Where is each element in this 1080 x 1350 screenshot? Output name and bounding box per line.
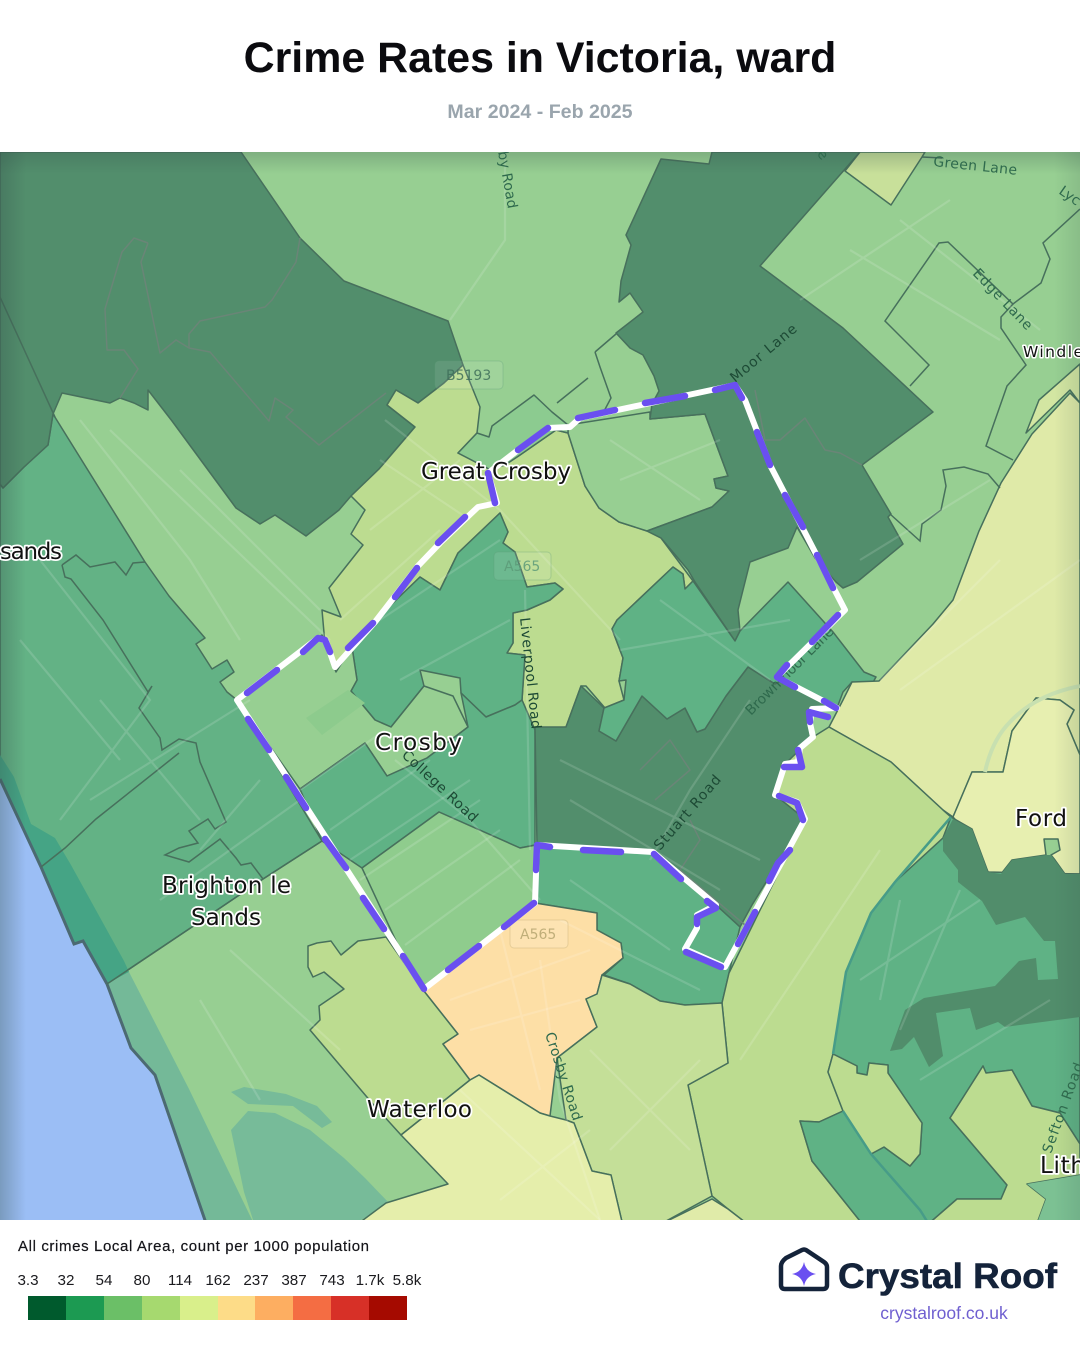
place labels: sands xyxy=(0,539,62,565)
road shields for A565 and B5193 xyxy=(435,361,568,948)
central-north lime area xyxy=(322,365,693,730)
lime south-centre xyxy=(557,975,728,1226)
place labels: Sands xyxy=(191,905,261,931)
legend scale labels: 80 xyxy=(134,1272,150,1289)
central dark south xyxy=(535,667,837,927)
north-east lime cell xyxy=(845,152,925,205)
road shields for A565 and B5193: B5193 xyxy=(446,368,491,384)
legend scale labels: 237 xyxy=(243,1272,269,1289)
lower-right teal area xyxy=(800,817,1080,1226)
small coastal pond xyxy=(231,1087,332,1128)
park patch in ward xyxy=(306,690,365,735)
south beach strip xyxy=(107,972,255,1226)
teal corner bottom right xyxy=(1027,1175,1080,1220)
logo house icon xyxy=(781,1250,827,1289)
road labels: College Road xyxy=(398,747,481,826)
east lime area xyxy=(688,727,951,1226)
place labels: Waterloo xyxy=(367,1097,472,1123)
top-right dark area xyxy=(616,152,933,641)
road labels: Liverpool Road xyxy=(516,617,544,730)
road labels xyxy=(398,140,1080,1155)
teal central west xyxy=(351,513,563,727)
small pale cell bottom xyxy=(670,1198,744,1220)
road labels: Moor Lane xyxy=(727,321,800,386)
shoreline edge xyxy=(0,779,207,1226)
road labels: Stuart Road xyxy=(651,772,725,854)
vignette xyxy=(0,152,1080,1220)
ward boundary white line xyxy=(237,385,845,989)
bottom pale yellow area xyxy=(355,1075,623,1226)
legend scale labels: 3.3 xyxy=(17,1272,39,1289)
legend scale labels: 387 xyxy=(281,1272,307,1289)
legend scale labels: 162 xyxy=(205,1272,231,1289)
lime cell north of canal xyxy=(828,1054,922,1166)
legend scale labels: 114 xyxy=(168,1272,192,1289)
east pale yellow area xyxy=(829,393,1080,817)
ward south pale cell xyxy=(362,811,534,944)
road labels: Green Lane xyxy=(933,154,1018,179)
legend scale labels: 32 xyxy=(58,1272,74,1289)
legend scale labels: 5.8k xyxy=(393,1272,421,1289)
lower-right dark band xyxy=(890,819,1080,1067)
Brownmoor Lane road label: Brownmoor Lane xyxy=(743,624,837,719)
place labels xyxy=(0,343,1080,1179)
teal south of ward xyxy=(535,845,740,1005)
map base area xyxy=(0,152,1080,1232)
website url: crystalroof.co.uk xyxy=(880,1303,1008,1323)
logo star xyxy=(792,1262,816,1286)
Ford pale area xyxy=(953,698,1080,874)
legend scale labels: 1.7k xyxy=(356,1272,384,1289)
pale sliver north-east xyxy=(1026,364,1080,433)
subtitle: date range: Mar 2024 - Feb 2025 xyxy=(447,101,633,123)
canal xyxy=(833,817,951,1226)
legend scale labels: 743 xyxy=(319,1272,345,1289)
road shields for A565 and B5193: A565 xyxy=(504,559,540,575)
legend scale labels xyxy=(17,1272,422,1289)
road shields for A565 and B5193: A565 xyxy=(520,927,556,943)
teal mid area xyxy=(599,567,876,741)
road labels: ne xyxy=(808,140,831,163)
coastal lake xyxy=(231,1111,389,1226)
inner neighbourhood borders xyxy=(105,238,862,925)
road labels: by Road xyxy=(494,150,520,210)
ward boundary purple dashes xyxy=(247,385,838,989)
place labels: Great Crosby xyxy=(421,459,571,485)
road labels: Edge Lane xyxy=(969,266,1036,334)
shoreline teal strip north xyxy=(0,755,129,984)
district outlines xyxy=(0,157,1080,879)
logo wordmark: Crystal Roof xyxy=(838,1257,1057,1296)
place labels: Brighton le xyxy=(162,873,291,899)
road labels: Crosby Road xyxy=(541,1030,585,1123)
ward north-west cell xyxy=(268,634,468,790)
legend title: All crimes Local Area, count per 1000 population xyxy=(18,1238,370,1255)
river strip in east xyxy=(985,686,1080,772)
lower-left green outline xyxy=(107,841,322,984)
legend scale labels: 54 xyxy=(96,1272,112,1289)
legend colour bar xyxy=(28,1296,407,1320)
lime cell around Litherland xyxy=(926,1066,1080,1226)
title: Crime Rates in Victoria, ward xyxy=(244,34,836,82)
place labels: Crosby xyxy=(375,730,462,756)
west teal area xyxy=(0,414,322,984)
peach highest-rate cell xyxy=(424,903,623,1116)
north pocket in ward xyxy=(568,412,729,531)
place labels: Ford xyxy=(1015,806,1067,832)
street network hints xyxy=(20,152,1080,1220)
teal area around College Road xyxy=(300,693,535,868)
Great Crosby north cell xyxy=(458,395,568,469)
top-left dark area xyxy=(0,152,463,536)
sea xyxy=(0,779,207,1226)
Waterloo lime area xyxy=(308,937,470,1135)
